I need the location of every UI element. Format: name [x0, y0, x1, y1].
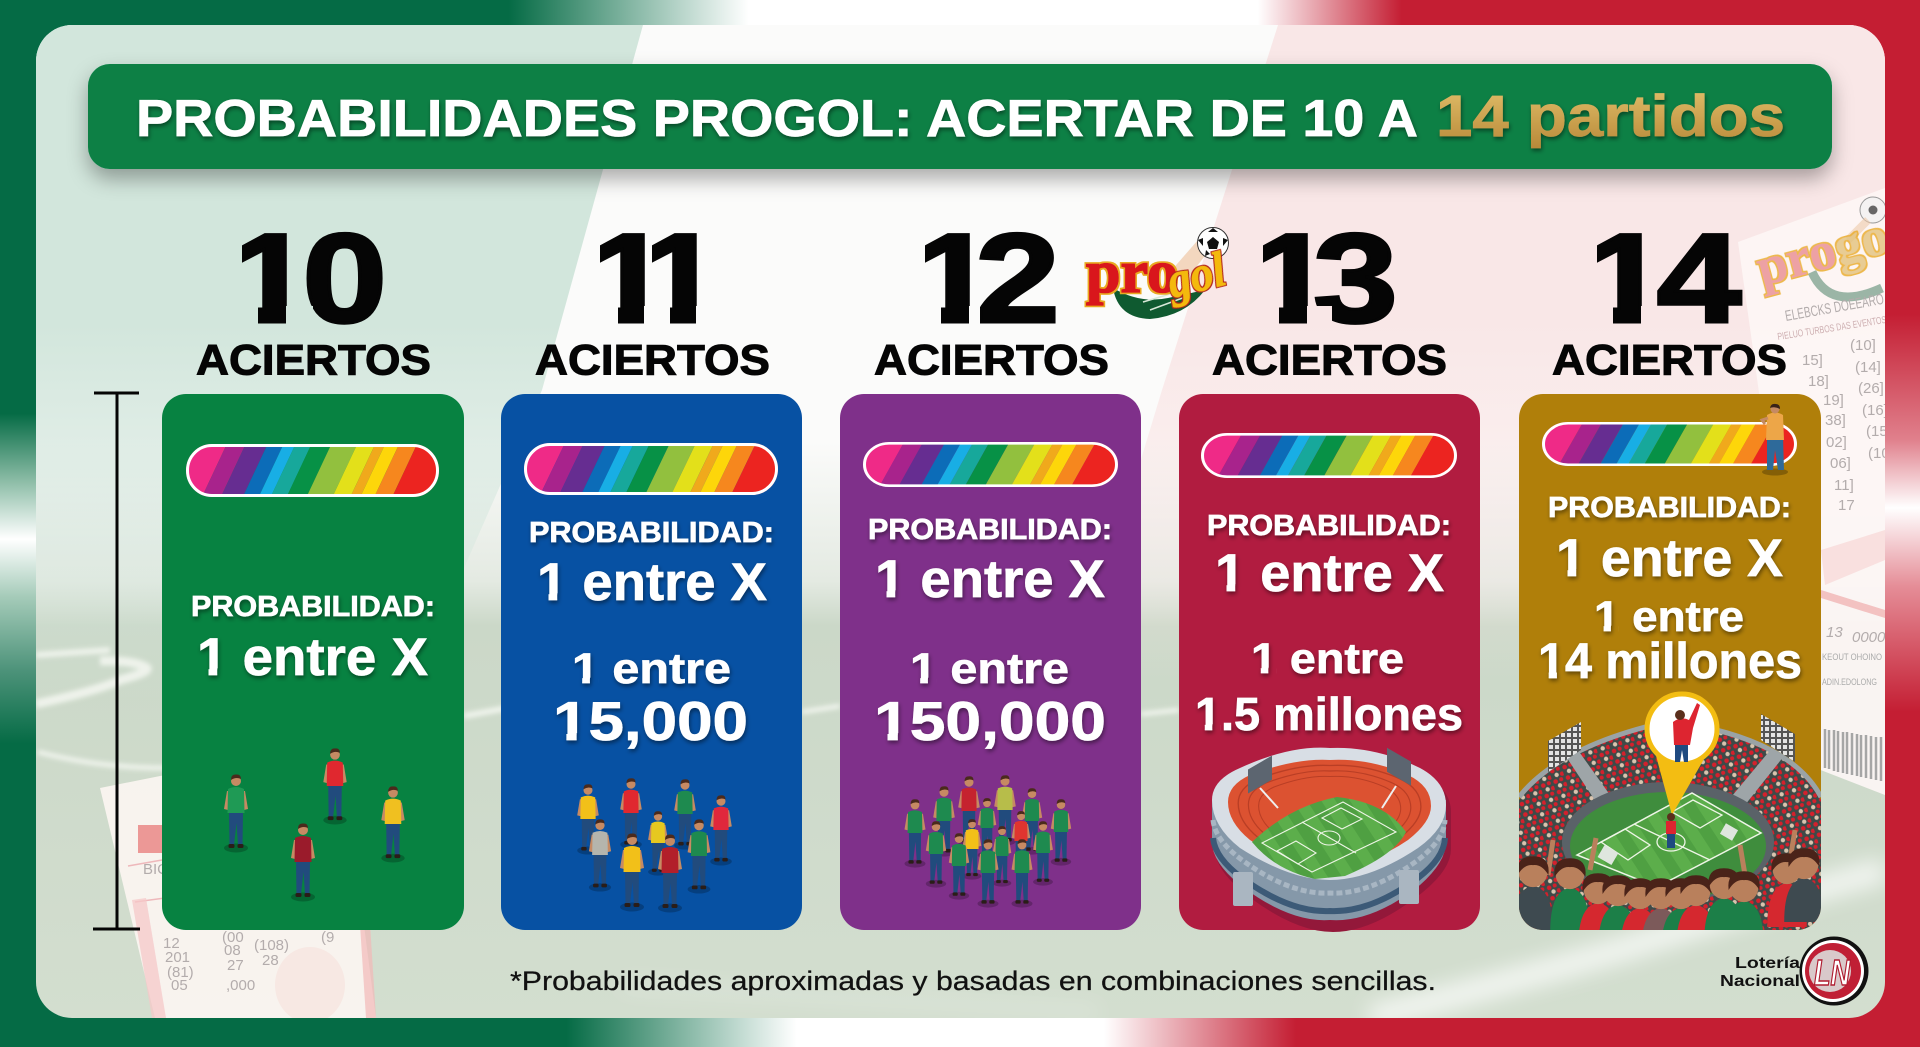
heading: 10 aciertos: ACIERTOS [196, 336, 431, 384]
ticket: top right: (10 [1868, 445, 1890, 462]
rainbow bar [186, 444, 439, 497]
ticket: bottom left: (108) [254, 937, 289, 954]
probability text [1195, 510, 1463, 740]
ticket: bottom left: (81) [167, 964, 194, 981]
heading: 11 aciertos [535, 233, 769, 376]
icon: four people [224, 748, 405, 902]
rainbow bar [863, 442, 1118, 487]
ticket: bottom left: 28 [262, 952, 279, 969]
ticket: top right: 19] [1823, 392, 1844, 409]
icon: location pin with person [1647, 694, 1717, 815]
probability text: PROBABILIDAD: [1548, 492, 1791, 524]
probability text [529, 517, 774, 752]
icon: person on pitch [1666, 813, 1676, 848]
ticket: top right: 13 [1826, 624, 1843, 641]
logo: Lotería Nacional [1720, 936, 1868, 1006]
heading: 11 aciertos: 11 [586, 207, 723, 349]
ticket: bottom left [100, 776, 376, 1018]
logo: Lotería Nacional: LN [1814, 952, 1851, 993]
panel: card 12 aciertos [840, 394, 1141, 930]
ticket: top right: 02] [1826, 434, 1847, 451]
scale bracket [93, 393, 140, 929]
probability text: PROBABILIDAD: [1207, 510, 1451, 542]
ticket: bottom left: BICICLO [143, 861, 203, 878]
ticket: top right: (15 [1866, 423, 1888, 440]
heading: 12 aciertos [874, 232, 1108, 376]
probability text [1538, 492, 1802, 689]
heading: 14 aciertos: 14 [1584, 207, 1741, 349]
rainbow bar [524, 443, 778, 495]
probability text: 1 entre [910, 645, 1069, 693]
icon: crowd of people [904, 775, 1071, 908]
probability text: 1 entre [572, 645, 731, 693]
probability text: 150,000 [874, 690, 1106, 752]
probability text [192, 595, 436, 680]
ticket: bottom left: ,000 [226, 977, 255, 994]
heading: 10 aciertos [196, 232, 430, 376]
ticket: top right: 06] [1830, 455, 1851, 472]
ticket: bottom left: 05 [171, 977, 188, 994]
probability text: 1 entre [1251, 635, 1404, 683]
ticket: bottom left: 08 [224, 942, 241, 959]
footnote: *Probabilidades aproximadas y basadas en combinaciones sencillas. [510, 966, 1436, 996]
ticket: top right: KEOUT OHOINO [1822, 652, 1882, 662]
ticket: bottom left: 27 [227, 957, 244, 974]
heading: 13 aciertos: ACIERTOS [1212, 336, 1447, 384]
ticket: top right: 0000 [1852, 629, 1886, 646]
icon: stadium [1212, 748, 1451, 932]
rainbow bar [1201, 433, 1457, 478]
rainbow bar [1542, 422, 1797, 466]
ticket: bottom left: 201 [165, 949, 190, 966]
title: 14 partidos [1436, 84, 1785, 149]
ticket: top right: 11] [1834, 477, 1854, 494]
ticket: top right: (14] [1855, 359, 1881, 376]
icon: floodlights [1548, 714, 1795, 772]
probability text: 1 entre X [1215, 544, 1444, 603]
ticket: top right: (16] [1862, 402, 1888, 419]
ticket: top right: 15] [1802, 352, 1823, 369]
logo: progol [1086, 228, 1231, 319]
logo: Lotería Nacional: Lotería [1735, 955, 1800, 972]
title [136, 84, 1785, 149]
panel: card 10 aciertos [162, 394, 464, 930]
icon: group of people [577, 778, 732, 912]
icon: person on bar [1762, 404, 1788, 476]
ticket: top right: 38] [1825, 412, 1846, 429]
ticket: top right: 18] [1808, 373, 1829, 390]
heading: 12 aciertos: 12 [912, 207, 1060, 349]
probability text: PROBABILIDAD: [868, 514, 1112, 546]
heading: 10 aciertos: 10 [228, 207, 387, 349]
probability text: 1.5 millones [1195, 688, 1463, 740]
heading: 13 aciertos: 13 [1250, 207, 1398, 349]
header bar [88, 64, 1832, 169]
probability text: 1 entre X [537, 553, 767, 612]
ticket: top right: (26] [1858, 380, 1884, 397]
panel: card 13 aciertos [1179, 394, 1480, 932]
ticket: bottom left: (9 [321, 929, 334, 946]
ticket: top right [1738, 188, 1895, 795]
ticket: top right: (10] [1850, 337, 1876, 354]
logo: Lotería Nacional: Nacional [1720, 973, 1800, 990]
probability text [868, 514, 1112, 752]
probability text: 15,000 [553, 690, 748, 752]
heading: 12 aciertos: ACIERTOS [874, 336, 1109, 384]
heading: 11 aciertos: ACIERTOS [535, 336, 770, 384]
logo: progol: gol [1160, 240, 1231, 309]
title: PROBABILIDADES PROGOL: ACERTAR DE 10 A [136, 90, 1418, 148]
ticket: bottom left: (00 [222, 929, 244, 946]
ticket: bottom left: 12 [163, 935, 180, 952]
ticket: top right: 17 [1838, 497, 1855, 514]
probability text: 1 entre [1594, 593, 1744, 641]
probability text: 1 entre X [197, 628, 428, 687]
ticket: top right: progo [1750, 205, 1895, 298]
logo: progol: pro [1086, 239, 1178, 305]
heading: 13 aciertos [1212, 232, 1446, 376]
heading: 14 aciertos: ACIERTOS [1552, 336, 1787, 384]
probability text: 14 millones [1538, 633, 1802, 689]
heading: 14 aciertos [1552, 233, 1786, 376]
probability text: 1 entre X [875, 550, 1105, 609]
probability text: 1 entre X [1556, 529, 1783, 588]
probability text: PROBABILIDAD: [191, 591, 435, 623]
panel: card 11 aciertos [501, 394, 802, 930]
ticket: top right: ADIN.EDOLONG [1822, 677, 1877, 687]
panel: card 14 aciertos [1513, 394, 1824, 952]
icon: stadium with fans and pin [1519, 724, 1821, 930]
probability text: PROBABILIDAD: [529, 517, 774, 549]
